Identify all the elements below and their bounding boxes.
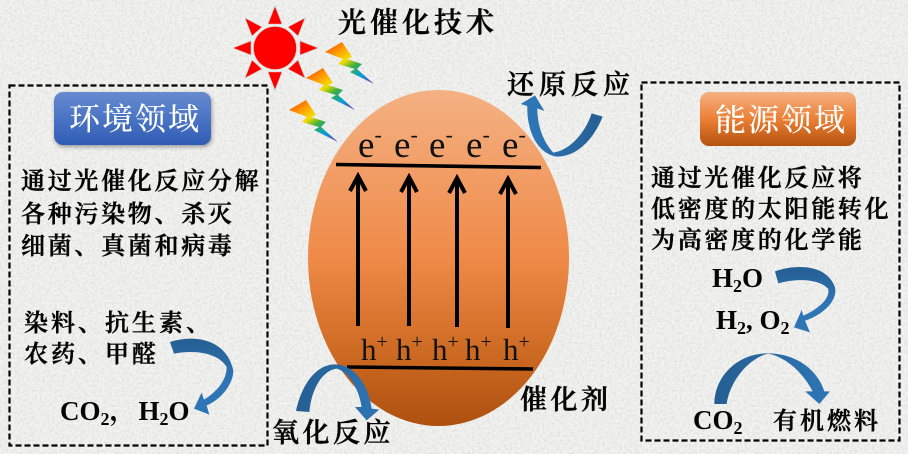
environment heading button xyxy=(54,92,211,145)
valence band line xyxy=(347,367,533,369)
holes row: h xyxy=(503,332,519,367)
title: 光催化技术 xyxy=(338,7,498,39)
electrons row: e xyxy=(502,125,518,166)
panel: energy xyxy=(642,82,900,440)
products label: H xyxy=(138,396,160,426)
electrons row: e xyxy=(358,125,374,166)
arrow: carbon dioxide to fuel xyxy=(714,353,830,404)
icon: light bolts xyxy=(289,42,374,142)
catalyst label: 催化剂 xyxy=(520,385,612,415)
conduction band line xyxy=(336,164,541,168)
holes row: h xyxy=(465,332,481,367)
products label: CO xyxy=(60,396,100,426)
water label: 2 xyxy=(733,276,742,296)
holes row: + xyxy=(518,331,530,353)
pollutants list: 农药、甲醛 xyxy=(24,341,159,368)
carbon dioxide label: 2 xyxy=(734,418,742,438)
electrons row: - xyxy=(410,122,418,147)
holes row: + xyxy=(448,331,459,353)
electrons row: - xyxy=(518,122,526,147)
hydrogen oxygen label: , O xyxy=(746,305,781,335)
hydrogen oxygen label: 2 xyxy=(737,318,746,338)
oxidation label: 氧化反应 xyxy=(272,418,394,448)
holes row: h xyxy=(432,332,448,367)
carbon dioxide label: CO xyxy=(693,405,734,435)
environment description: 细菌、真菌和病毒 xyxy=(21,233,235,260)
pollutants list: 染料、抗生素、 xyxy=(24,310,213,337)
electrons row: e xyxy=(466,125,482,166)
products label: 2 xyxy=(160,409,169,429)
energy heading button: 能源领域 xyxy=(715,103,847,138)
energy description: 为高密度的化学能 xyxy=(651,227,865,254)
water label: O xyxy=(742,263,763,293)
holes row: + xyxy=(412,331,423,353)
energy description: 通过光催化反应将 xyxy=(651,165,865,192)
panel: environment xyxy=(10,86,268,446)
electrons row: - xyxy=(374,122,382,147)
electrons row: e xyxy=(394,125,410,166)
environment heading button: 环境领域 xyxy=(69,102,201,137)
arrow: reduction xyxy=(521,95,603,157)
holes row: h xyxy=(396,332,412,367)
products label: 2 xyxy=(100,409,110,429)
holes row: + xyxy=(376,331,388,353)
environment description: 各种污染物、杀灭 xyxy=(21,201,235,228)
reduction label: 还原反应 xyxy=(507,70,635,100)
holes row: + xyxy=(480,331,492,353)
products label: ， xyxy=(110,389,136,428)
hydrogen oxygen label: 2 xyxy=(781,318,790,338)
arrow: pollutants to products xyxy=(170,339,233,415)
organic fuel label: 有机燃料 xyxy=(773,408,881,435)
electrons row: e xyxy=(429,125,445,166)
icon: sun xyxy=(233,6,318,90)
arrow: oxidation xyxy=(296,364,379,420)
products label: O xyxy=(169,396,190,426)
electrons row: - xyxy=(445,122,453,147)
hydrogen oxygen label: H xyxy=(716,305,737,335)
energy heading button xyxy=(700,92,856,146)
electrons row: - xyxy=(482,122,490,147)
environment description: 通过光催化反应分解 xyxy=(21,168,261,195)
water label: H xyxy=(712,263,733,293)
arrow: water splitting xyxy=(775,267,835,332)
energy description: 低密度的太阳能转化 xyxy=(651,196,891,223)
holes row: h xyxy=(361,332,377,367)
excitation arrows xyxy=(350,176,516,328)
catalyst particle xyxy=(308,90,569,426)
